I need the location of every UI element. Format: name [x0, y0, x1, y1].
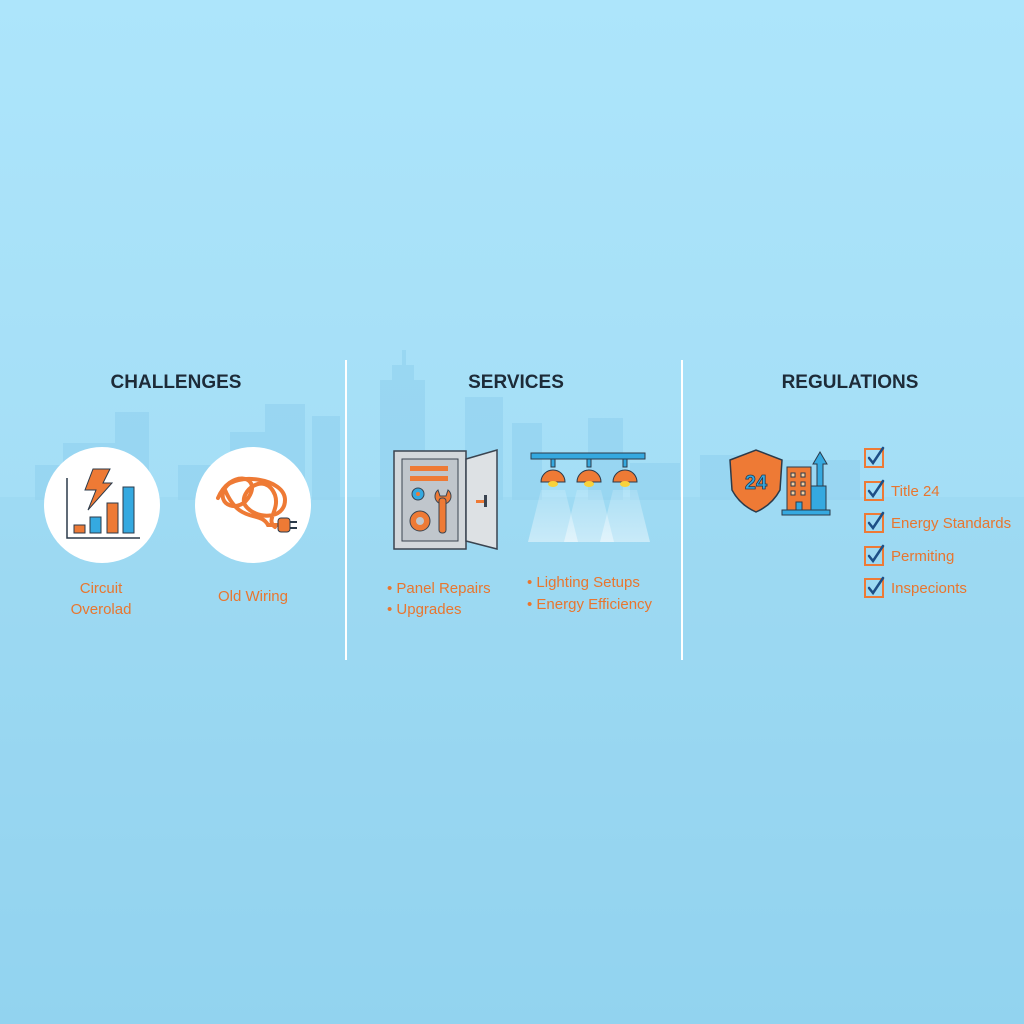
list: lighting services: • Lighting Setups [527, 574, 640, 591]
panel: challenges [44, 372, 311, 618]
icon: electrical panel [394, 450, 497, 549]
checklist: Permiting [891, 548, 954, 565]
list: panel services [387, 580, 491, 618]
heading: regulations: REGULATIONS [782, 372, 918, 393]
heading: services: SERVICES [468, 372, 564, 393]
list: panel services: • Panel Repairs [387, 580, 491, 597]
icon: lighting [528, 453, 650, 542]
label: old wiring: Old Wiring [218, 588, 288, 605]
icon: circuit overload [44, 447, 160, 563]
panel: regulations [730, 372, 1011, 597]
icon: building [782, 452, 830, 515]
list: panel services: • Upgrades [387, 601, 461, 618]
checklist: Title 24 [891, 483, 940, 500]
icon: title 24 shield [730, 450, 782, 512]
panel: challenges: Overolad [71, 601, 131, 618]
list: lighting services: • Energy Efficiency [527, 596, 653, 613]
label: circuit overload: Circuit [80, 580, 123, 597]
list: lighting services [527, 574, 653, 613]
heading: challenges: CHALLENGES [111, 372, 241, 393]
panel: services [387, 372, 653, 618]
icon: title 24 shield: 24 [745, 472, 768, 494]
icon: old wiring [195, 447, 311, 563]
checklist: Inspecionts [891, 580, 967, 597]
checklist [865, 448, 1011, 597]
divider lines [346, 360, 682, 660]
checklist: Energy Standards [891, 515, 1011, 532]
